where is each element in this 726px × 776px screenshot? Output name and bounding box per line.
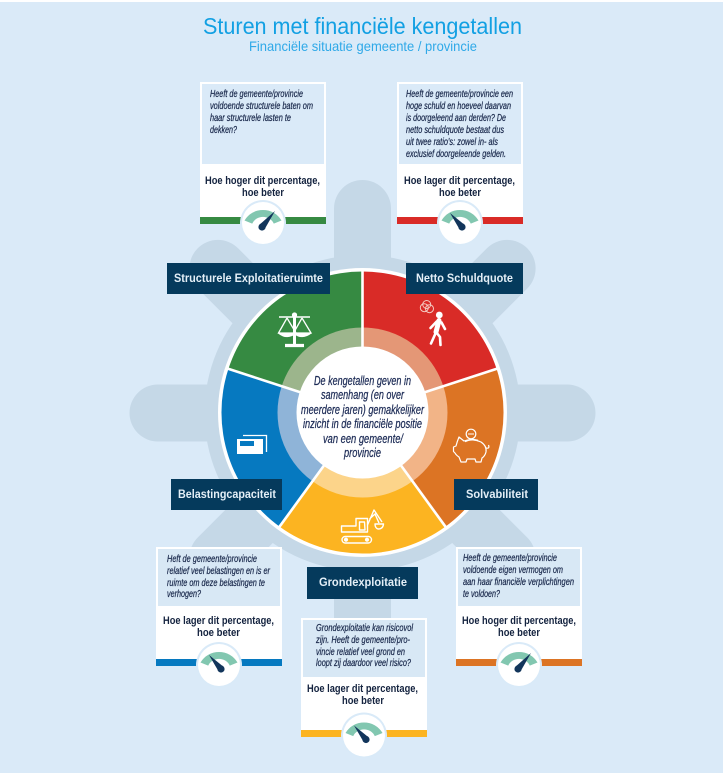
center text: inzicht in de financiële positie: [303, 416, 422, 431]
panel: netto schuldquote card: is doorgeleend aan derden? De: [406, 112, 506, 124]
panel: netto schuldquote card: Heeft de gemeente/provincie een: [406, 88, 513, 100]
panel: structurele exploitatieruimte card: haar structurele lasten te: [210, 112, 291, 124]
panel: solvabiliteit card: hoe beter: [498, 627, 541, 639]
panel: netto schuldquote card: Hoe lager dit percentage,: [404, 175, 515, 187]
center text: provincie: [343, 445, 381, 460]
panel: netto schuldquote card: netto schuldquote bestaat dus: [406, 124, 505, 136]
panel: belastingcapaciteit card: verhogen?: [167, 588, 201, 600]
panel: grondexploitatie card: zijn. Heeft de gemeente/pro-: [315, 634, 410, 646]
icon: scales: [278, 313, 311, 346]
label: netto schuldquote: [406, 263, 523, 294]
icon: cards: [237, 436, 266, 454]
panel: solvabiliteit card: [456, 547, 582, 688]
panel: grondexploitatie card: Grondexploitatie kan risicovol: [316, 622, 413, 634]
panel: structurele exploitatieruimte card: voldoende structurele baten om: [210, 100, 313, 112]
panel: grondexploitatie card: vincie relatief veel grond en: [316, 646, 405, 658]
panel: solvabiliteit card: aan haar financiële verplichtingen: [463, 576, 574, 588]
label: structurele exploitatieruimte: Structurele Exploitatieruimte: [174, 273, 323, 285]
segment: belastingcapaciteit: [221, 369, 362, 527]
panel: belastingcapaciteit card: Heft de gemeente/provincie: [167, 553, 257, 565]
label: netto schuldquote: Netto Schuldquote: [416, 273, 513, 285]
panel: belastingcapaciteit card: hoe beter: [197, 627, 241, 639]
inner pale ring: [278, 328, 447, 498]
panel: structurele exploitatieruimte card: [200, 82, 326, 246]
center text: meerdere jaren) gemakkelijker: [301, 402, 424, 417]
panel: belastingcapaciteit card: relatief veel belastingen en is er: [167, 565, 270, 577]
panel: netto schuldquote card: uit twee ratio's: zowel in- als: [406, 136, 499, 148]
panel: solvabiliteit card: voldoende eigen vermogen om: [463, 564, 563, 576]
panel: grondexploitatie card: loopt zij daardoor veel risico?: [316, 657, 411, 669]
panel: solvabiliteit card: Heeft de gemeente/provincie: [463, 552, 557, 564]
icon: excavator: [342, 510, 384, 543]
panel: grondexploitatie card: Hoe lager dit percentage,: [307, 683, 418, 695]
panel: structurele exploitatieruimte card: dekken?: [210, 124, 237, 136]
panel: solvabiliteit card: te voldoen?: [463, 588, 500, 600]
panel: netto schuldquote card: hoe beter: [439, 187, 482, 199]
label: belastingcapaciteit: Belastingcapaciteit: [178, 489, 276, 501]
center text: De kengetallen geven in: [314, 373, 411, 388]
label: solvabiliteit: Solvabiliteit: [466, 489, 528, 501]
segment: structurele exploitatieruimte: [228, 272, 362, 412]
segment: netto schuldquote: [362, 272, 497, 412]
panel: grondexploitatie card: hoe beter: [342, 695, 385, 707]
gear background: [130, 180, 596, 646]
segment: grondexploitatie: [280, 412, 445, 554]
label: solvabiliteit: [454, 479, 538, 510]
panel: grondexploitatie card: [301, 618, 427, 758]
panel: belastingcapaciteit card: Hoe lager dit percentage,: [163, 615, 274, 627]
panel: netto schuldquote card: [397, 82, 523, 246]
panel: solvabiliteit card: Hoe hoger dit percentage,: [462, 615, 576, 627]
center text: samenhang (en over: [321, 387, 404, 402]
icon: walking person with coins: [420, 300, 445, 345]
label: grondexploitatie: [307, 567, 418, 599]
panel: netto schuldquote card: exclusief doorgeleende gelden.: [406, 148, 506, 160]
label: grondexploitatie: Grondexploitatie: [319, 577, 407, 589]
panel: structurele exploitatieruimte card: Hoe hoger dit percentage,: [205, 175, 320, 187]
panel: structurele exploitatieruimte card: Heeft de gemeente/provincie: [210, 88, 303, 100]
subtitle: Financiële situatie gemeente / provincie: [249, 38, 477, 54]
panel: belastingcapaciteit card: ruimte om deze belastingen te: [167, 577, 265, 589]
center text: [301, 373, 424, 460]
segment: solvabiliteit: [362, 369, 504, 527]
panel: netto schuldquote card: hoge schuld en hoeveel daarvan: [406, 100, 511, 112]
label: belastingcapaciteit: [171, 479, 282, 510]
panel: structurele exploitatieruimte card: hoe beter: [242, 187, 285, 199]
label: structurele exploitatieruimte: [167, 263, 330, 294]
title: Sturen met financiële kengetallen: [203, 13, 522, 39]
panel: belastingcapaciteit card: [156, 547, 282, 688]
center text: van een gemeente/: [323, 431, 404, 446]
ring chart of five indicators: [218, 268, 507, 557]
icon: piggy bank: [454, 429, 489, 462]
